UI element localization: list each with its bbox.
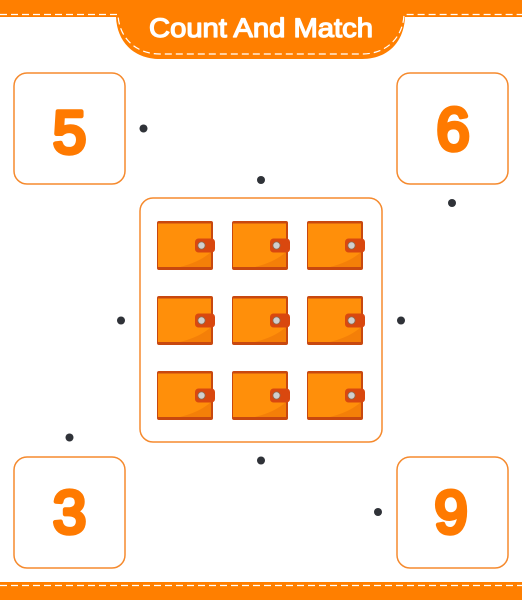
wallet 8 [232, 371, 290, 420]
number card: 9 [397, 457, 508, 568]
number card: 6 [397, 73, 508, 184]
title: Count And Match [149, 13, 373, 43]
wallet 7 [157, 371, 215, 420]
matching dots [66, 124, 456, 516]
number card: 5 [14, 73, 125, 184]
wallet 9 [307, 371, 365, 420]
number card: 9: 9 [434, 479, 468, 546]
wallet panel [140, 198, 382, 442]
number card: 3 [14, 457, 125, 568]
number card: 5: 5 [53, 99, 86, 166]
header banner [0, 0, 522, 59]
footer banner [0, 582, 522, 600]
wallet 2 [232, 221, 290, 270]
wallet 5 [232, 296, 290, 345]
wallet 1 [157, 221, 215, 270]
number card: 6: 6 [436, 96, 470, 163]
wallet 4 [157, 296, 215, 345]
wallet 3 [307, 221, 365, 270]
number card: 3: 3 [53, 479, 86, 546]
wallet 6 [307, 296, 365, 345]
